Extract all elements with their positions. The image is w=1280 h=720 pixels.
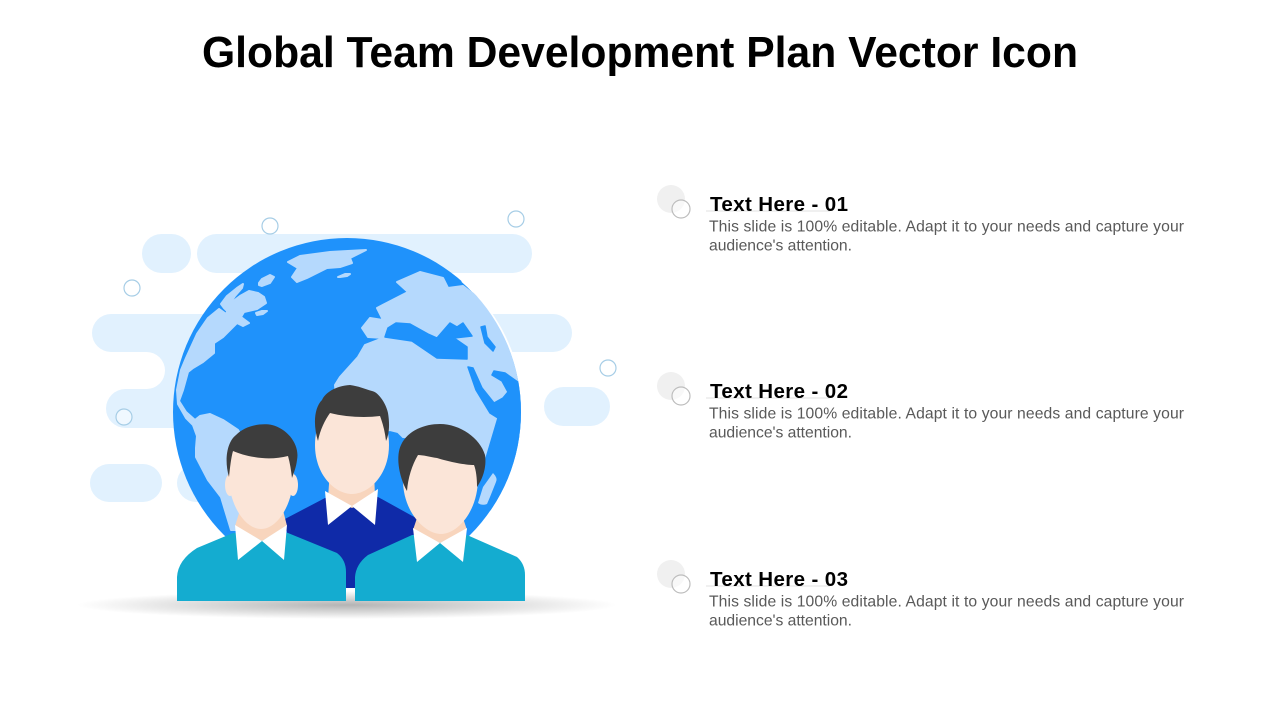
body 02: audience's attention.: [709, 424, 852, 442]
ground shadow: [77, 591, 617, 619]
person: center: [283, 385, 417, 588]
title: Global Team Development Plan Vector Icon: [202, 28, 1078, 77]
bullet 03: [657, 560, 690, 593]
continents: [177, 250, 540, 530]
bullet 02: [657, 372, 690, 405]
heading 02: Text Here - 02: [710, 380, 848, 403]
island: [478, 473, 497, 505]
item 03: [657, 560, 1184, 630]
person: right: [355, 424, 525, 601]
body 01: audience's attention.: [709, 238, 852, 254]
body 03: This slide is 100% editable. Adapt it to your needs and capture your: [709, 594, 1184, 610]
small floating circles: [116, 211, 616, 425]
person: left: [177, 424, 346, 601]
body 01: This slide is 100% editable. Adapt it to your needs and capture your: [709, 218, 1184, 236]
heading 01: Text Here - 01: [710, 193, 848, 216]
heading 03: Text Here - 03: [710, 568, 848, 591]
bullet 01: [657, 185, 690, 218]
illustration: global team: [60, 211, 617, 619]
globe: [173, 238, 521, 536]
body 02: This slide is 100% editable. Adapt it to your needs and capture your: [709, 406, 1184, 422]
item 01: [657, 185, 1184, 254]
body 03: audience's attention.: [709, 612, 852, 630]
seas: [384, 322, 521, 511]
background clouds: [60, 234, 610, 502]
item 02: [657, 372, 1184, 442]
